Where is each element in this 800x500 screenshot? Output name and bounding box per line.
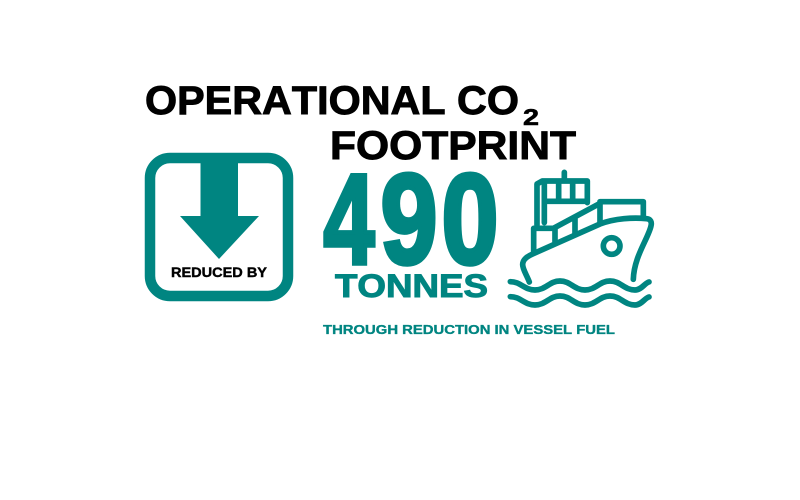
- mast: [556, 172, 573, 180]
- big number: 490: 9: [381, 148, 438, 291]
- title: [145, 79, 576, 168]
- label: reduced by: REDUCED BY: [171, 265, 267, 280]
- title: FOOTPRINT: [330, 124, 576, 168]
- icon: reduced by box with down arrow: [150, 158, 288, 296]
- ship hull: [523, 218, 651, 282]
- bridge: [537, 181, 587, 225]
- title: 2: [523, 104, 539, 130]
- title: OPERATIONAL CO: [145, 79, 519, 123]
- porthole: [603, 238, 620, 254]
- big number: 490: 4: [324, 148, 375, 291]
- caption: through reduction in vessel fuel: THROUGH REDUCTION IN VESSEL FUEL: [323, 322, 615, 337]
- label: tonnes: TONNES: [335, 268, 488, 304]
- waves: [510, 281, 649, 290]
- text: 0: [442, 148, 498, 291]
- icon: container ship on waves: [510, 172, 651, 305]
- icon: down arrow: [180, 160, 259, 259]
- containers: [534, 202, 643, 252]
